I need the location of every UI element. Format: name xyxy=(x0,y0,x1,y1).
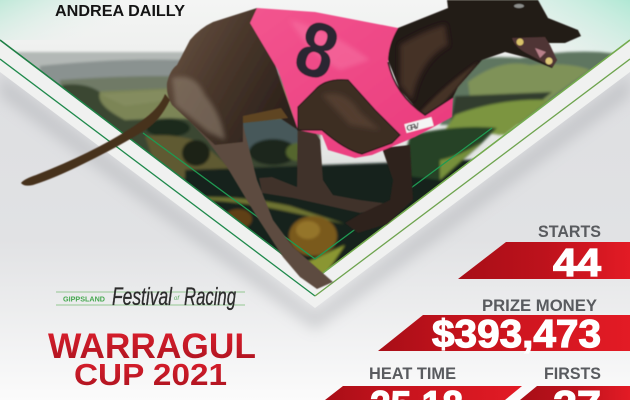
dog: tail xyxy=(21,94,170,186)
dog: neck highlight xyxy=(400,25,448,100)
stat: starts xyxy=(458,223,630,285)
panel: landscape photo xyxy=(0,0,630,300)
white V band xyxy=(0,38,630,308)
dog: neck and head xyxy=(385,0,581,118)
dog: far foreleg and paw xyxy=(259,105,383,213)
stat: prize money: $393,473 xyxy=(432,313,601,356)
stat: starts: 44 xyxy=(553,242,601,285)
stat: starts: STARTS xyxy=(538,223,601,241)
dog: pink racing vest xyxy=(250,2,453,158)
dog: near foreleg and paw xyxy=(345,145,413,233)
inner green V line xyxy=(143,128,492,259)
dog: tan belly xyxy=(243,108,288,123)
greyhound photo xyxy=(21,0,581,289)
logo: Gippsland Festival of Racing: GIPPSLAND xyxy=(63,296,105,304)
logo: Gippsland Festival of Racing: of xyxy=(174,296,180,302)
dog: upper foreleg shoulder xyxy=(298,80,400,154)
outer green V lines xyxy=(0,40,630,296)
vest number 8: 8 xyxy=(285,2,349,98)
title: Warragul Cup 2021: WARRAGUL xyxy=(48,327,256,366)
logo: Gippsland Festival of Racing: Festival xyxy=(112,283,173,311)
logo: Gippsland Festival of Racing: Racing xyxy=(184,283,236,311)
stat: heat time: HEAT TIME xyxy=(369,365,456,383)
vest logo xyxy=(404,117,434,133)
stat: heat time xyxy=(325,365,522,400)
dog: rear highlight xyxy=(172,77,225,140)
vest logo: GRV xyxy=(405,121,421,133)
dog: eye xyxy=(514,4,524,8)
stat: firsts xyxy=(520,365,630,400)
band drop shadow xyxy=(0,74,630,330)
title: Warragul Cup 2021: CUP 2021 xyxy=(74,357,227,392)
dog: hind leg xyxy=(170,80,333,289)
stat: firsts: FIRSTS xyxy=(544,365,601,383)
title: Warragul Cup 2021 xyxy=(48,327,256,392)
text: trainer name: ANDREA DAILLY xyxy=(55,3,185,20)
stat: prize money xyxy=(378,297,630,356)
dog: body and rump xyxy=(167,8,298,145)
stat: prize money: PRIZE MONEY xyxy=(482,297,597,315)
dog: open mouth and teeth xyxy=(512,37,557,67)
logo: Gippsland Festival of Racing xyxy=(56,283,245,311)
